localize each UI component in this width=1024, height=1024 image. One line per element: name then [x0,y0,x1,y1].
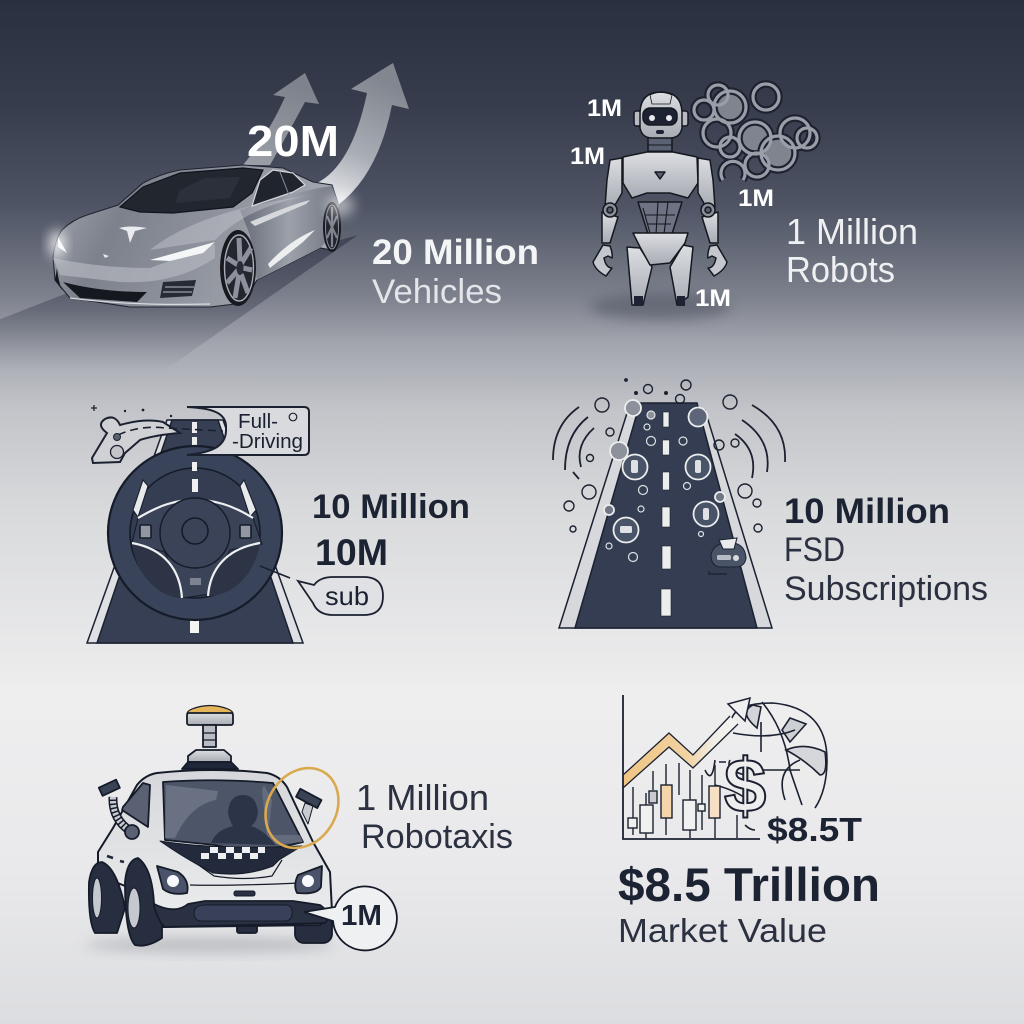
labels: 1M: 1M [570,143,605,170]
labels: 1M: 1M [587,95,622,122]
heading: 1 Million: 1 Million [356,777,489,818]
right camera [302,803,313,824]
panel: 1 million robots [570,84,918,320]
callout: sub: sub [325,581,369,611]
callout: Full-Driving: -Driving [232,431,303,453]
front right wheel and under tyre [295,905,332,943]
robot shadow [590,294,730,320]
left camera arm [113,797,132,832]
icon: humanoid robot [593,92,727,306]
left leg [627,247,652,305]
icon: robotaxi [89,706,332,946]
icon: growth arrow large [317,63,409,205]
driver silhouette [211,795,276,845]
chart: rising trend arrow [623,698,750,788]
windshield [120,168,263,213]
abdomen [638,202,682,234]
neck [648,136,672,158]
panel: 1 million robotaxis [85,706,513,953]
spoke panel [132,500,262,598]
body [98,770,332,927]
icon: bag badge [709,538,746,574]
side window [122,783,150,827]
left arm [605,158,622,207]
headlights [150,242,215,261]
panel: FSD subscriptions [553,379,988,628]
rear left wheel arch [89,862,125,933]
icon: steering wheel [108,446,282,620]
label: 20M: 20M [247,117,339,166]
ground shadow [85,937,335,953]
text: Subscriptions: Subscriptions [784,570,988,608]
text: Market Value: Market Value [618,912,827,949]
icon: signal arcs [553,405,785,479]
headlights [157,866,188,894]
roof sensor [187,706,233,714]
hood dark [160,841,302,874]
paddles [133,480,148,517]
icon: ring cluster [694,84,817,180]
ears [634,111,641,126]
panel: full-driving steering wheel [87,405,470,643]
label: $8.5T: $8.5T [767,811,862,848]
right arm [698,158,715,207]
icon: globe [705,702,827,830]
hood contour [200,860,282,878]
icon: winding mini road [91,405,223,463]
headlight glows [326,193,354,217]
front left wheel arch [125,858,162,946]
callout: Full-Driving: Full- [238,411,278,433]
panel: 20 million vehicles [0,63,539,370]
heading: 10 Million: 10 Million [784,492,950,531]
text: 10M: 10M [315,532,388,573]
icon: road behind wheel [87,420,303,643]
bumper [152,901,328,927]
rear wheel [323,202,341,252]
pelvis [633,233,688,265]
labels: 1M: 1M [738,185,774,212]
side windows [252,170,305,206]
logo [119,226,147,243]
text: Robotaxis: Robotaxis [361,818,513,856]
panel: market value [618,695,880,949]
labels: 1M [570,95,774,312]
checker [201,847,265,859]
side highlight [268,230,315,268]
text: Vehicles: Vehicles [372,273,502,311]
right leg [670,245,693,305]
sub pointer line [260,566,290,578]
icon: floating rings [564,379,762,532]
chart: candlesticks [628,763,737,838]
road shadow under car [0,235,358,370]
callout: 1M [304,886,397,950]
head [640,92,682,138]
callout: 1M: 1M [341,900,382,932]
icon: dollar sign: $ [724,744,766,829]
heading: 20 Million: 20 Million [372,233,539,272]
callout: Full-Driving [187,407,309,455]
labels: 1M: 1M [695,285,731,312]
icon: growth arrow small [243,73,319,165]
chart axes [623,695,760,839]
text: FSD: FSD [784,531,845,569]
handle [234,891,255,896]
heading: $8.5 Trillion: $8.5 Trillion [618,858,880,911]
text: Robots: Robots [786,249,895,290]
highlight ring [251,754,353,862]
icon: sports car [49,165,354,307]
torso [623,152,698,198]
heading: 10 Million: 10 Million [312,488,470,526]
heading: 1 Million: 1 Million [786,211,918,252]
icon: feature badges on road [604,400,725,542]
front wheel [220,230,256,306]
icon: road with dashes [559,403,772,628]
grille [63,282,147,302]
windshield [163,780,303,849]
callout: sub [298,577,383,615]
